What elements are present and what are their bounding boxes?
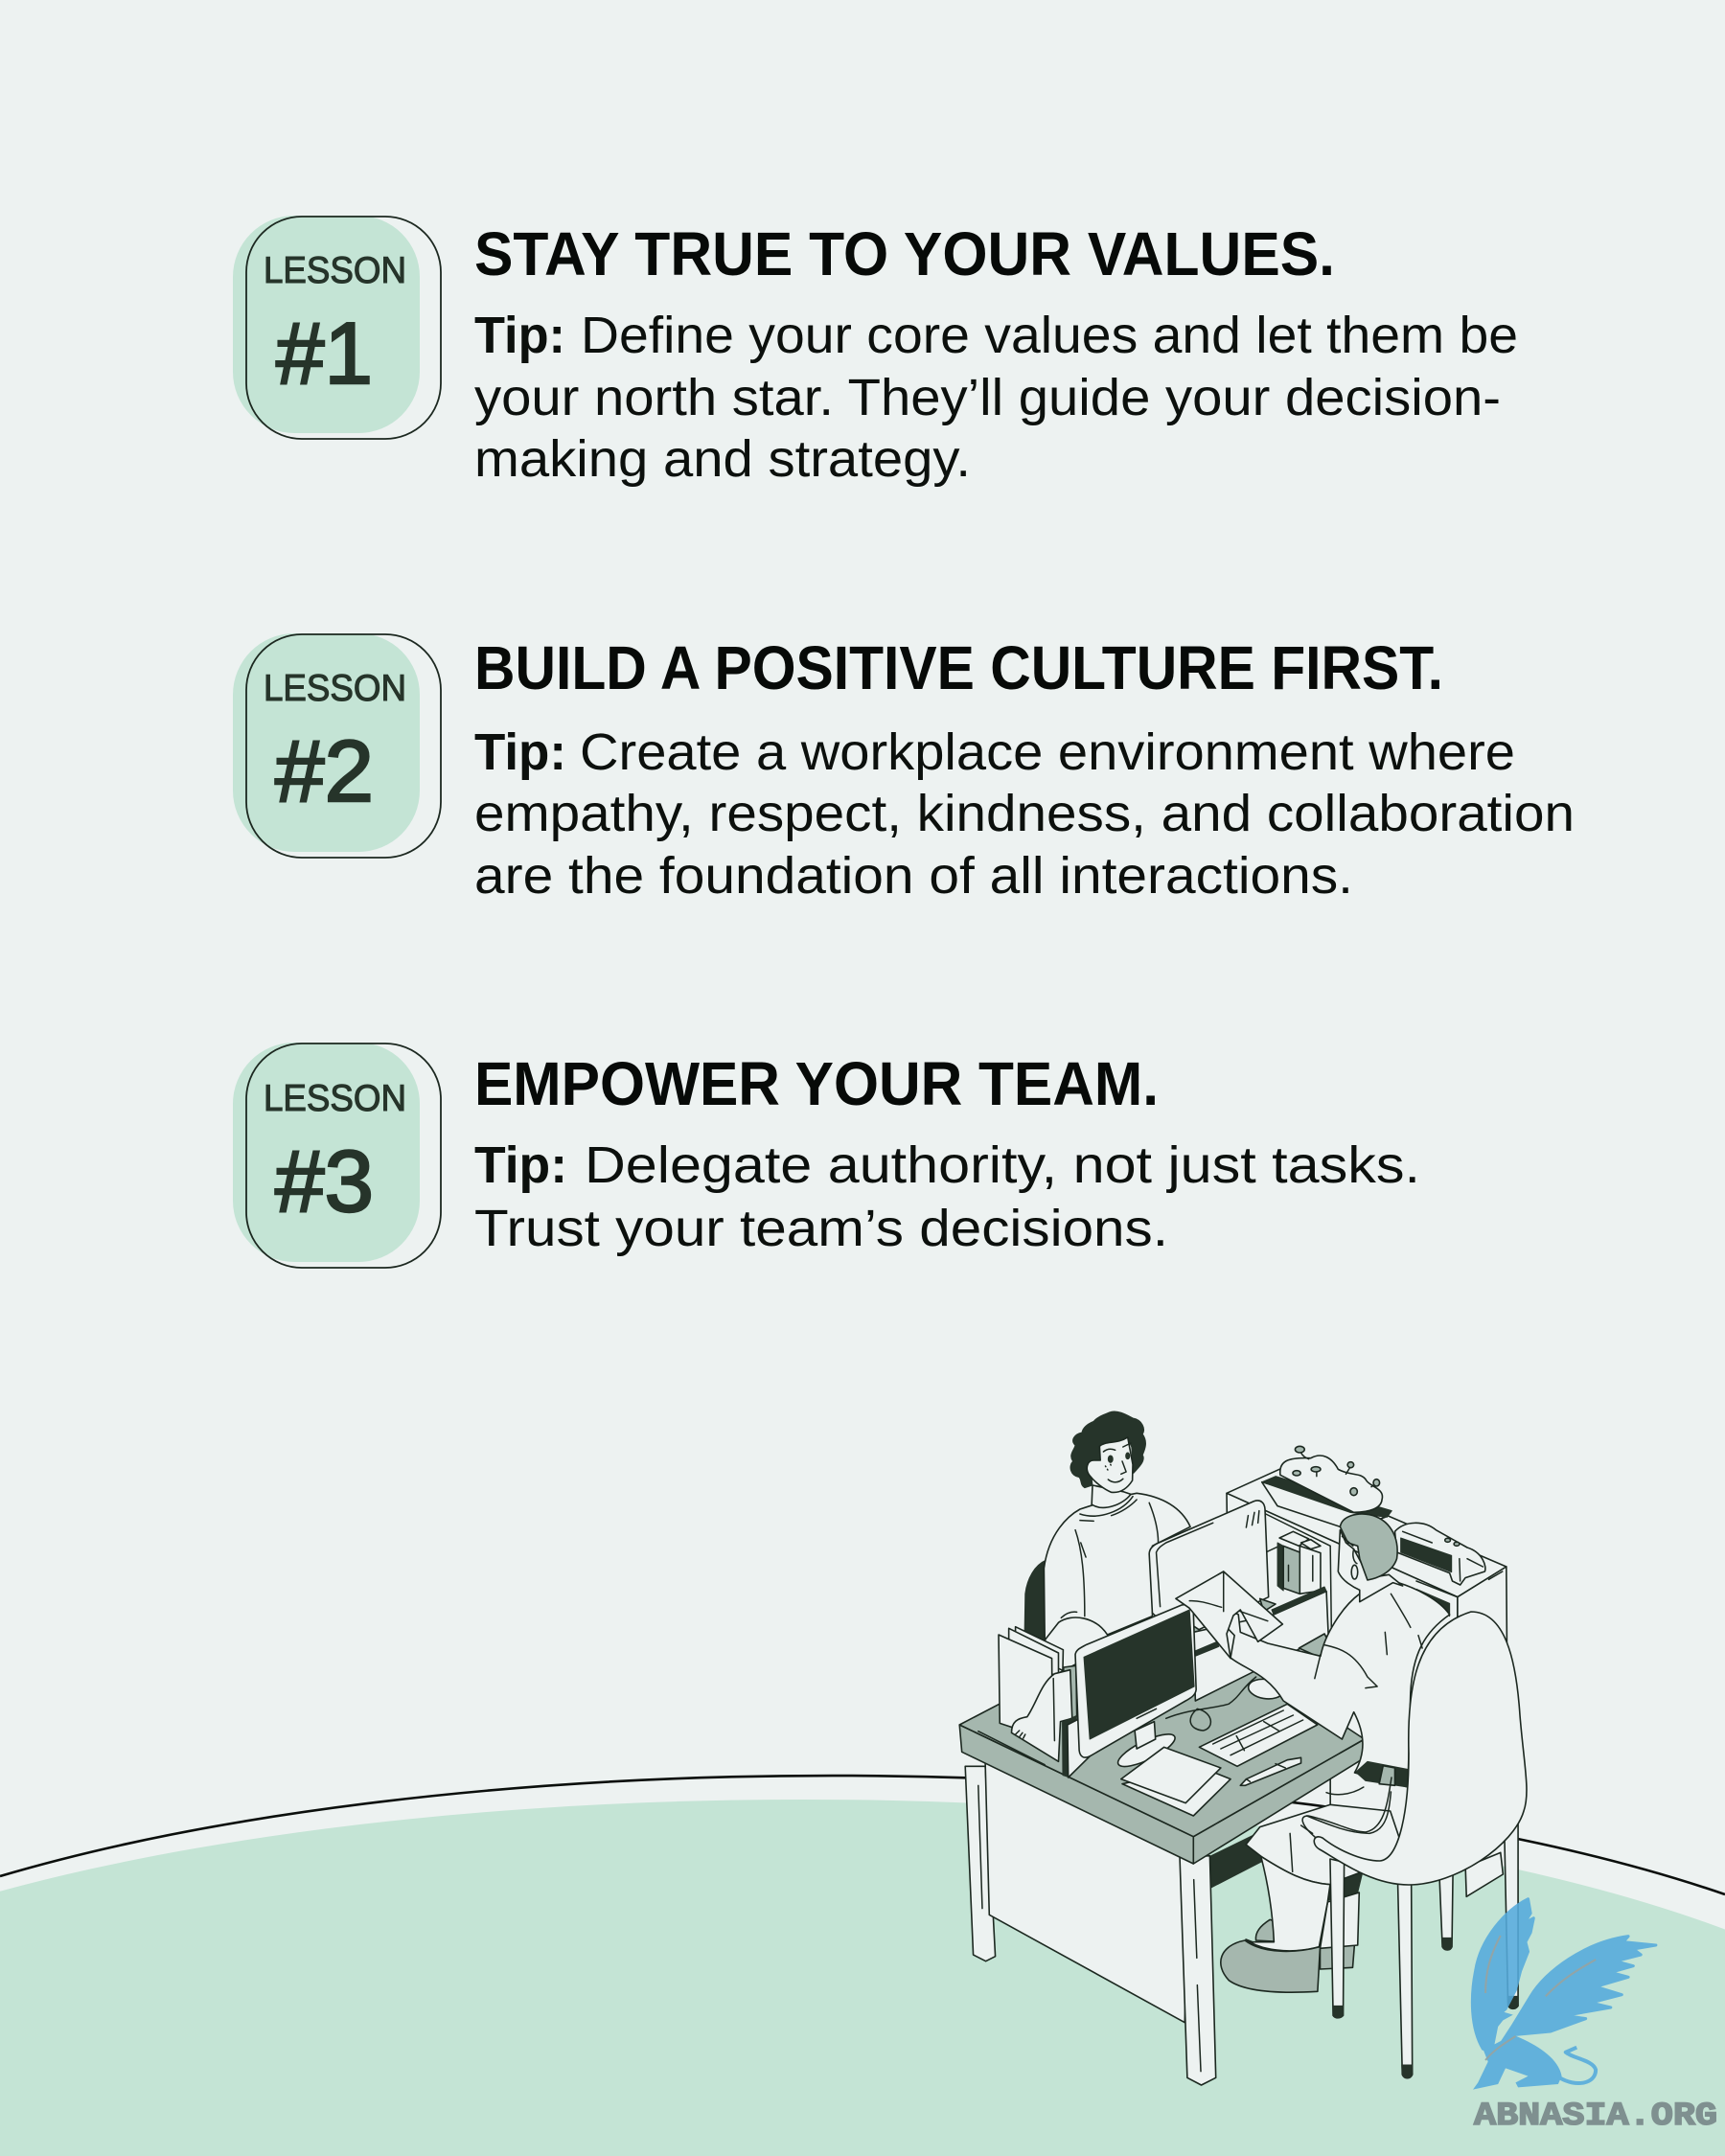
belt [1356, 1761, 1409, 1787]
office chair back and seat [1314, 1612, 1527, 1885]
lesson 3 tip text: Trust your team’s decisions. [474, 1200, 1168, 1257]
desk top [959, 1613, 1367, 1864]
person 1: chair [1024, 1560, 1046, 1640]
lesson 1 tip text [474, 307, 1518, 488]
papers, pen, keyboard and mouse [1121, 1634, 1330, 1816]
dark shadow under desk [1209, 1827, 1270, 1889]
file organizer [999, 1627, 1091, 1778]
watermark: griffin logo [1472, 1899, 1656, 2090]
lesson 1 tip text: Define your core values and let them be [581, 307, 1518, 364]
lesson 3 tip text: Tip: [474, 1136, 567, 1194]
printer [1395, 1523, 1485, 1585]
lesson 2 tip text [474, 723, 1575, 905]
desk front leg [1180, 1856, 1216, 2085]
lesson 3 badge [233, 1043, 441, 1268]
plant on tray [1262, 1446, 1392, 1530]
lesson 2 badge [233, 633, 441, 858]
person 2: seat edge line [1302, 1778, 1392, 1837]
lesson 1 tip text: Tip: [474, 307, 565, 364]
background hill: outline arc [0, 1776, 1725, 1894]
white divider panel behind front monitor [1193, 1587, 1328, 1701]
lesson 3 tip text: Delegate authority, not just tasks. [585, 1136, 1420, 1194]
lesson 2 badge: #2 [275, 723, 374, 820]
lesson 3 heading: EMPOWER YOUR TEAM. [474, 1049, 1159, 1118]
lesson 2 tip text: Tip: [474, 723, 566, 781]
person 2: torso, arm and hand [1176, 1514, 1450, 1833]
chair legs [1330, 1818, 1518, 2078]
lesson 1 badge: #1 [276, 306, 373, 402]
lesson 1 badge [233, 216, 441, 439]
lesson 3 tip text [474, 1136, 1420, 1257]
lesson 2 badge: LESSON [264, 668, 406, 709]
person 1: torso and head [1044, 1411, 1190, 1640]
face [1087, 1437, 1133, 1492]
envelope [1176, 1571, 1282, 1659]
desk rear left leg [965, 1766, 996, 1961]
front monitor [1075, 1605, 1196, 1772]
lesson 1 heading: STAY TRUE TO YOUR VALUES. [474, 219, 1335, 288]
books [1277, 1531, 1321, 1594]
desk underside, side panel and legs [965, 1763, 1363, 2085]
watermark: ABNASIA.ORG: ABNASIA.ORG [1474, 2099, 1717, 2135]
head [1338, 1530, 1403, 1602]
lesson 1 badge: LESSON [264, 250, 406, 291]
lesson 2 tip text: empathy, respect, kindness, and collaboration [474, 785, 1575, 842]
illustration: two coworkers at a desk [959, 1411, 1527, 2085]
lesson 2 heading: BUILD A POSITIVE CULTURE FIRST. [474, 633, 1443, 702]
lesson 2 tip text: are the foundation of all interactions. [474, 847, 1353, 905]
lesson 3 badge: #3 [275, 1134, 374, 1230]
background hill: green area [0, 1800, 1725, 2156]
lesson 2 tip text: Create a workplace environment where [580, 723, 1515, 781]
person 2: legs and shoes [1221, 1804, 1405, 1992]
lesson 1 tip text: your north star. They’ll guide your decision- [474, 369, 1501, 426]
rear monitor [1149, 1501, 1276, 1651]
filing cabinet and shelf [1227, 1469, 1508, 1837]
curly hair [1070, 1411, 1145, 1488]
lesson 1 tip text: making and strategy. [474, 430, 971, 488]
lesson 3 badge: LESSON [264, 1078, 406, 1119]
